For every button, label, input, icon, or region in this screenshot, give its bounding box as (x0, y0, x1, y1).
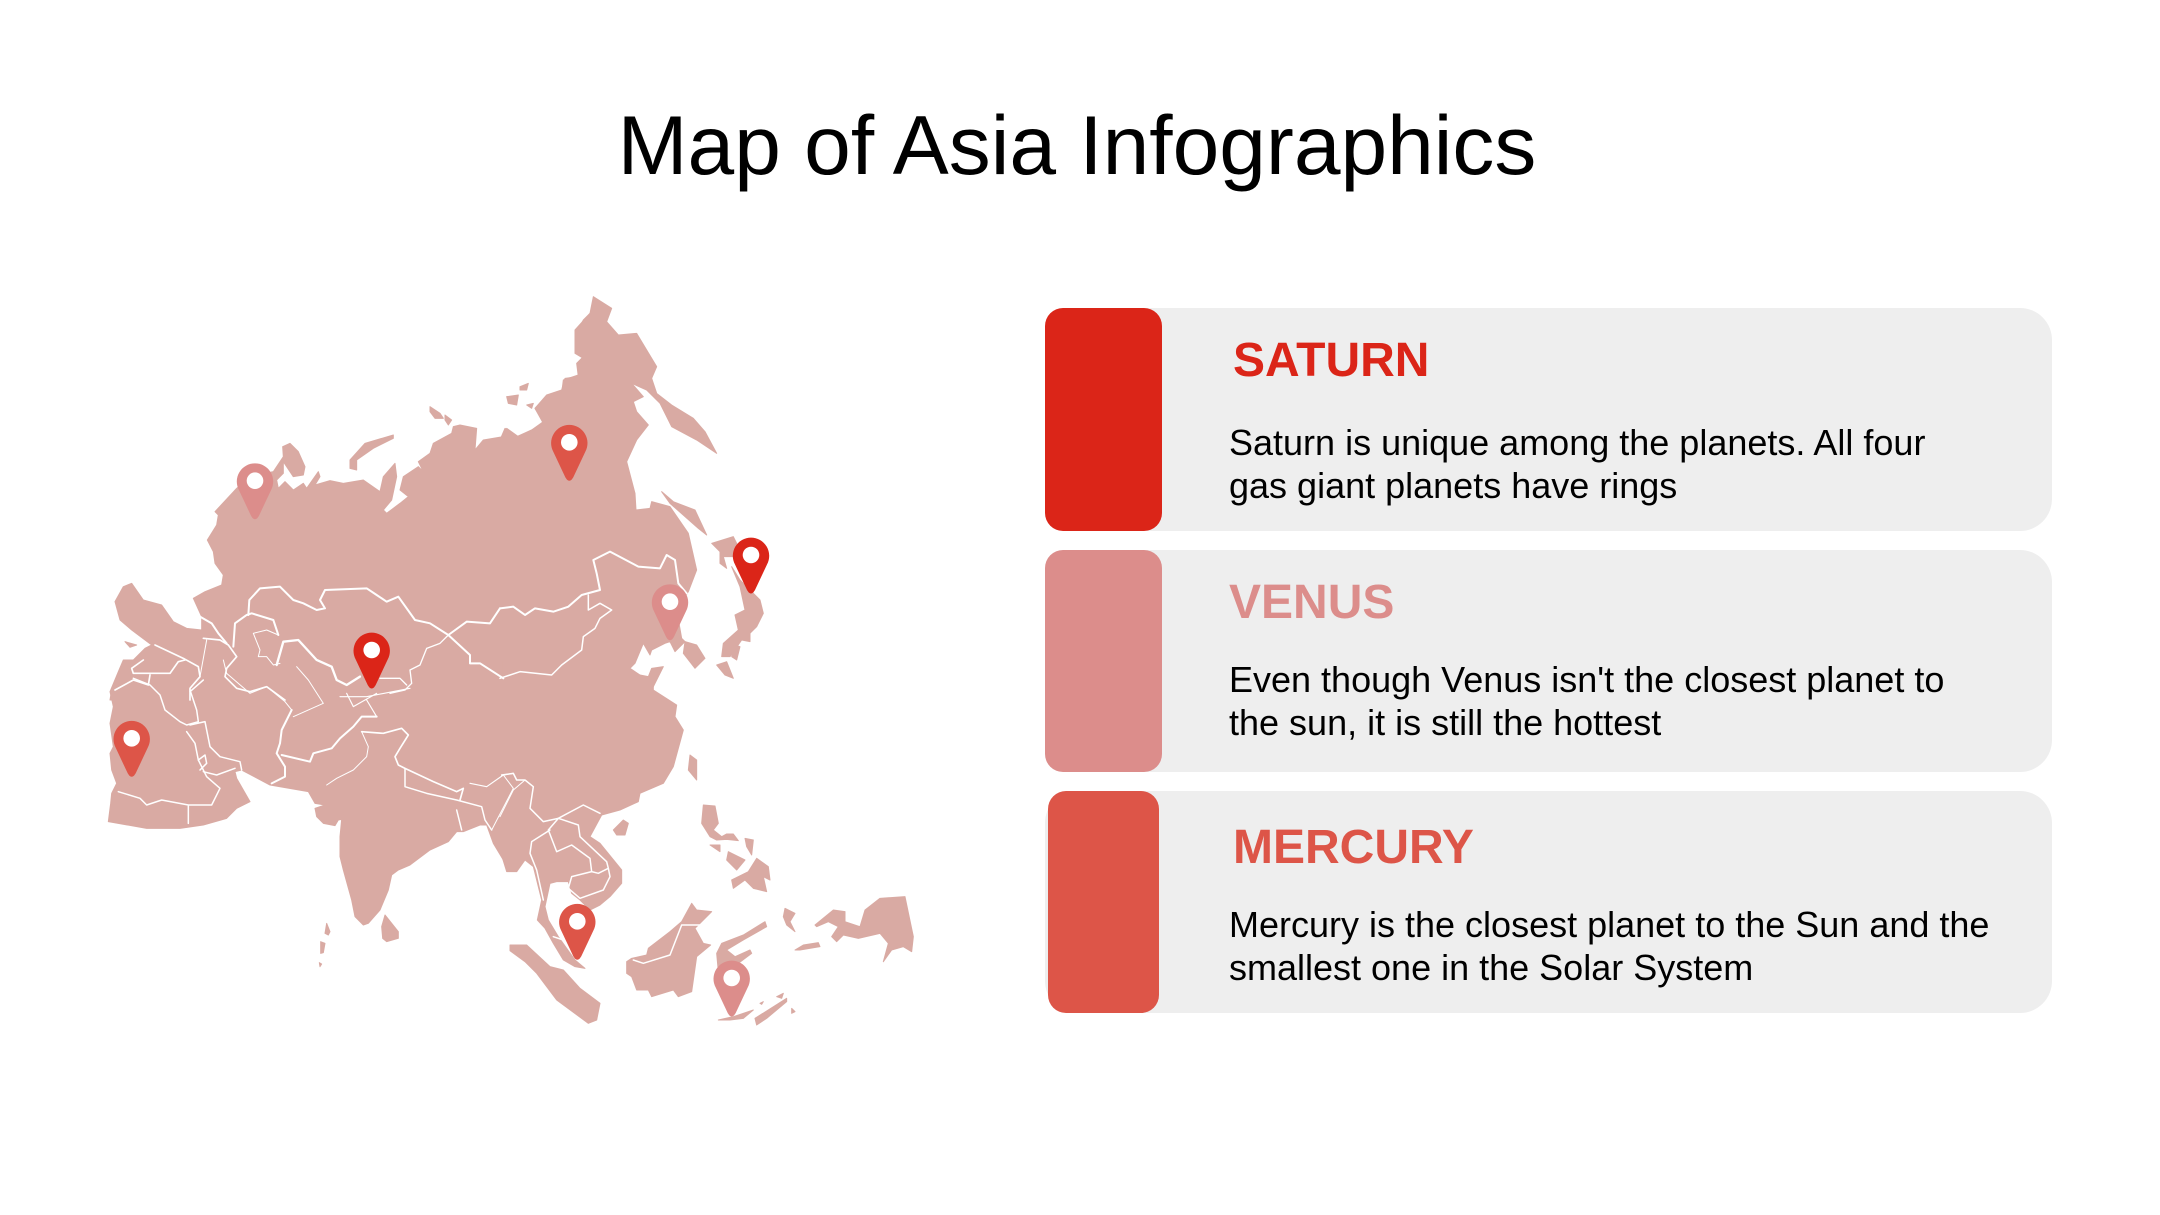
Saturn colour block (1045, 308, 1162, 531)
Mercury heading: MERCURY (1233, 821, 1474, 874)
southeast Asia landmass and islands (500, 680, 913, 1025)
pin: Venus Korea (652, 584, 688, 640)
panel: Saturn (1045, 308, 2052, 531)
northeast Asia landmass (500, 297, 763, 700)
Saturn heading: SATURN (1233, 334, 1429, 387)
Venus description (1229, 659, 1944, 743)
pin: Mercury Malaysia (559, 904, 596, 960)
Venus description: the sun, it is still the hottest (1229, 702, 1661, 743)
Saturn description (1229, 422, 1925, 506)
Saturn description: gas giant planets have rings (1229, 465, 1677, 506)
panel: Venus (1045, 550, 2052, 772)
pin: Saturn Japan (733, 538, 769, 594)
pin: Saturn central Asia (354, 633, 390, 688)
south Asia landmass (108, 660, 503, 967)
northwest Asia landmass (110, 313, 590, 700)
pin: Mercury Arabia (114, 721, 150, 777)
Saturn description: Saturn is unique among the planets. All four (1229, 422, 1925, 463)
Venus description: Even though Venus isn't the closest planet to (1229, 659, 1944, 700)
Mercury description: smallest one in the Solar System (1229, 947, 1753, 988)
Venus colour block (1045, 550, 1162, 772)
Mercury description: Mercury is the closest planet to the Sun and the (1229, 904, 1989, 945)
pin: Venus north-west (237, 463, 273, 519)
map: landmass and borders (108, 297, 913, 1025)
title: Map of Asia Infographics (618, 98, 1536, 192)
panel: Mercury (1045, 791, 2052, 1013)
pin: Venus Indonesia (714, 961, 750, 1016)
pin: Mercury north-east (551, 425, 588, 481)
Venus heading: VENUS (1229, 576, 1394, 629)
Mercury colour block (1048, 791, 1159, 1013)
Mercury description (1229, 904, 1989, 988)
